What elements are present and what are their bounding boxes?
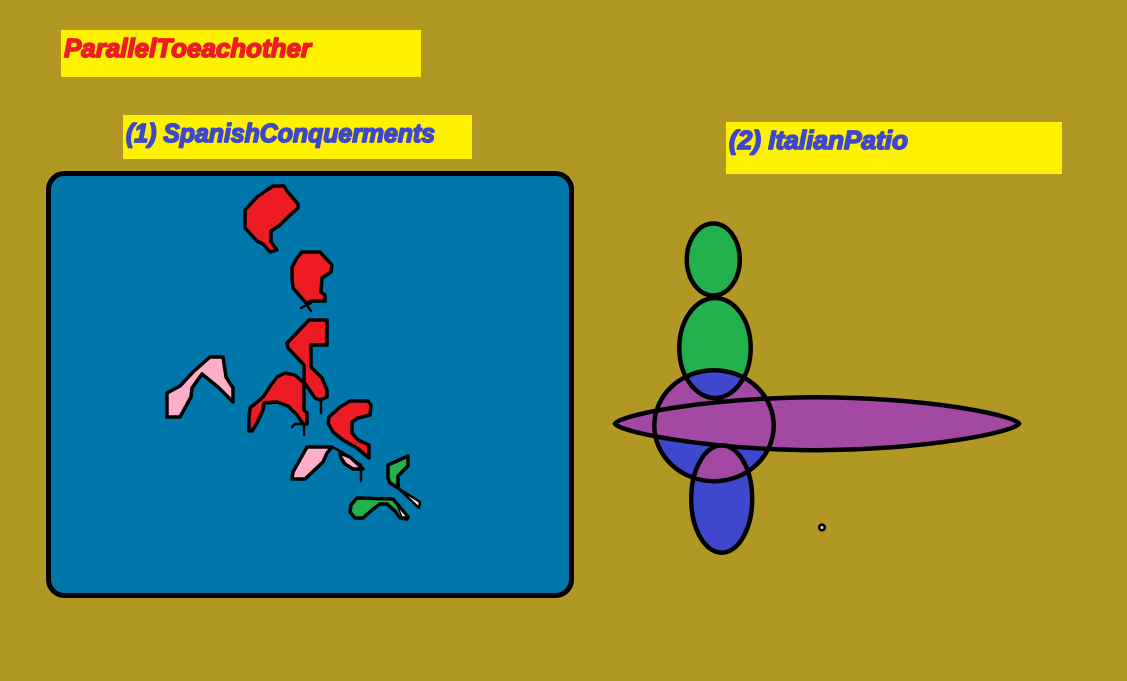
bottom blue ellipse fill — [691, 445, 752, 553]
island: red north 1 — [245, 186, 298, 252]
heading: (1) SpanishConquerments: (1) SpanishConquerments — [126, 118, 435, 148]
island: red east — [328, 401, 371, 458]
middle green ellipse fill — [679, 298, 751, 398]
circle fill: blue lower half — [654, 370, 774, 481]
ellipse outlines — [615, 298, 1019, 553]
heading: (1) SpanishConquerments — [123, 115, 472, 159]
overlap: green ellipse and circle — [689, 372, 741, 396]
island: red central 3 — [287, 320, 327, 413]
island: red north 2 — [292, 252, 332, 311]
title: ParallelToeachother — [64, 33, 313, 63]
small dot — [819, 525, 825, 530]
island: green east — [388, 456, 420, 508]
island: red central arc — [249, 373, 307, 435]
infographic canvas — [46, 30, 1062, 598]
wide purple lens fill — [615, 397, 1019, 450]
island: pink south — [292, 447, 363, 481]
title — [61, 30, 421, 77]
heading: (2) ItalianPatio — [726, 122, 1062, 174]
island: pink west — [167, 357, 233, 417]
map background — [48, 174, 572, 596]
heading: (2) ItalianPatio: (2) ItalianPatio — [729, 125, 908, 155]
diagram: overlapping ellipses — [615, 224, 1019, 553]
circle fill: purple upper half — [660, 380, 762, 408]
top green ellipse — [687, 224, 740, 296]
panel: map of islands — [48, 174, 572, 596]
overlap: bottom ellipse and circle — [696, 448, 746, 479]
island: green south — [350, 498, 408, 519]
